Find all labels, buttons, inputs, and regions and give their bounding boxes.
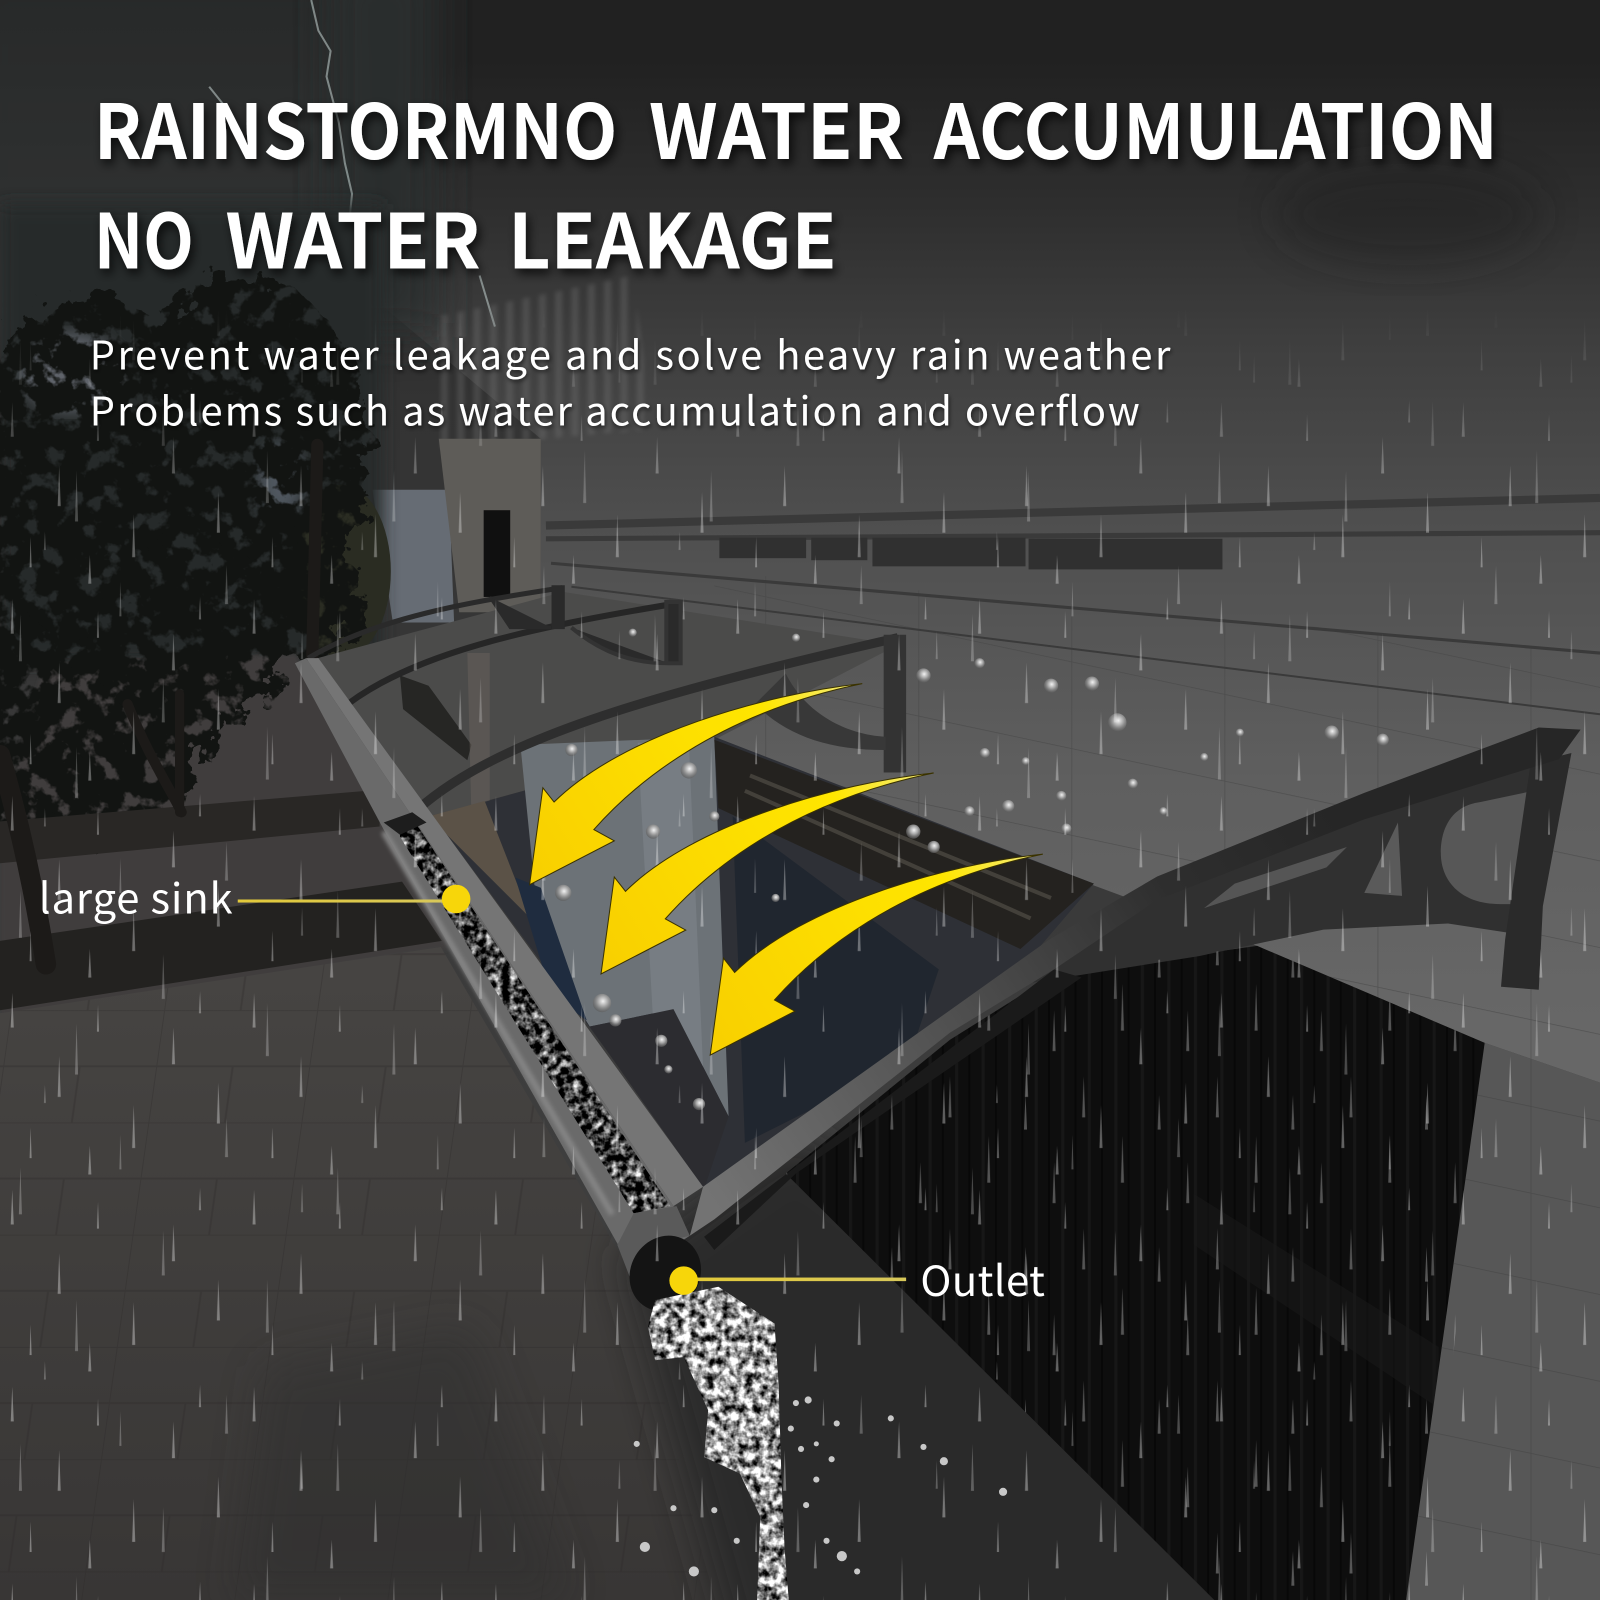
lower panel triangle	[590, 1009, 729, 1189]
dark retaining wall through panel	[400, 676, 471, 760]
title	[94, 71, 1498, 290]
marker dot	[669, 1266, 698, 1295]
subtitle text	[90, 324, 1171, 438]
leader line	[238, 899, 447, 903]
main arm	[690, 728, 1581, 1236]
columns through the panel	[520, 737, 729, 1116]
pavement tiles	[0, 947, 714, 1600]
title line 2: WATER	[226, 180, 481, 290]
middle arm	[410, 638, 898, 816]
marker dot	[442, 885, 470, 913]
panel front rail	[306, 658, 703, 1206]
gutter highlight	[384, 832, 612, 1214]
label: outlet: Outlet	[920, 1248, 1045, 1309]
pillar through panel	[467, 653, 490, 816]
middle bracket strut	[755, 673, 886, 750]
soft cloud edge over wall	[327, 0, 439, 337]
ground right of gutter	[622, 1133, 1327, 1600]
denser rain in front of the door	[786, 946, 1485, 1600]
water body	[648, 1287, 789, 1600]
title line 2: LEAKAGE	[508, 180, 837, 290]
subtitle line 2: Problems such as water accumulation and overflow	[90, 381, 1140, 438]
garage door	[786, 946, 1485, 1600]
callout: outlet	[669, 1248, 1045, 1309]
storm cloud glow on the left	[0, 0, 367, 337]
bright sky gap behind trees	[20, 334, 122, 411]
distant building	[372, 490, 454, 622]
distant pavement	[0, 653, 449, 1020]
dark slats through the panel	[714, 740, 1094, 949]
middle bracket	[884, 635, 906, 772]
rail joint	[384, 812, 427, 835]
foreground pavement	[0, 947, 1224, 1600]
tree trunks	[0, 445, 317, 964]
pillar tiles	[1406, 1043, 1600, 1600]
hedge strip lower	[0, 882, 442, 1010]
water spout from outlet	[634, 1287, 1007, 1600]
lightning bolt	[209, 0, 495, 337]
wall mount plate	[1501, 753, 1571, 990]
gutter outlet opening	[616, 1223, 715, 1324]
yellow arrows pointing to gutter	[530, 684, 1043, 1055]
outlet arm underside	[704, 969, 1082, 1250]
hedge strip upper	[0, 790, 380, 863]
bracket cut-out: round	[1441, 792, 1529, 904]
navy shadow	[515, 878, 587, 1020]
label: large sink: large sink	[39, 865, 233, 926]
wall seen through the panel	[306, 592, 898, 816]
arrow 2	[601, 773, 934, 974]
callout: large sink	[39, 865, 470, 926]
dark lower band	[733, 816, 939, 1143]
distant doorway	[484, 510, 510, 597]
gutter outer body	[295, 658, 690, 1272]
title line 1: WATER	[649, 71, 904, 181]
awning: transparent panel, gutter and arms	[295, 587, 1581, 1324]
bright sky gap beside tree	[258, 443, 303, 516]
door shadow lines	[1194, 1194, 1439, 1408]
gutter end cap	[617, 1206, 690, 1277]
water droplets on the panel	[555, 629, 1389, 1110]
title line 2: NO	[94, 180, 194, 290]
far arm 2	[339, 603, 679, 711]
leader line	[694, 1278, 906, 1281]
far bracket 2	[571, 602, 681, 663]
building wall	[383, 0, 1600, 1083]
pavement dark patch	[235, 1327, 571, 1600]
arrow 1	[530, 684, 862, 885]
main bracket	[1033, 760, 1536, 983]
wall ledges	[546, 498, 1600, 714]
tree backdrop	[0, 204, 383, 663]
right pillar	[1406, 1043, 1600, 1600]
far bracket 1	[490, 587, 563, 628]
dark cloud patches	[1276, 163, 1541, 265]
view below the panel	[434, 737, 1094, 1196]
floor through the panel	[429, 801, 531, 918]
arrow 3	[710, 854, 1043, 1055]
olive tree	[293, 485, 391, 658]
far arm 1	[308, 588, 562, 658]
splash droplets	[634, 1396, 1007, 1577]
title line 1: ACCUMULATION	[933, 71, 1498, 181]
title line 1: RAINSTORMNO	[94, 71, 617, 181]
wall tile courses	[714, 571, 1600, 1083]
tree canopy	[0, 276, 367, 857]
distant building block	[439, 439, 541, 612]
gutter channel	[400, 819, 670, 1213]
roof slats in the distance	[439, 276, 653, 449]
subtitle line 1: Prevent water leakage and solve heavy rain weather	[90, 324, 1171, 381]
small wedge between arm and strut	[1204, 847, 1347, 908]
bracket cut-out: triangle	[1364, 822, 1402, 896]
column shading	[638, 741, 704, 1092]
ledge recesses	[719, 538, 1222, 569]
